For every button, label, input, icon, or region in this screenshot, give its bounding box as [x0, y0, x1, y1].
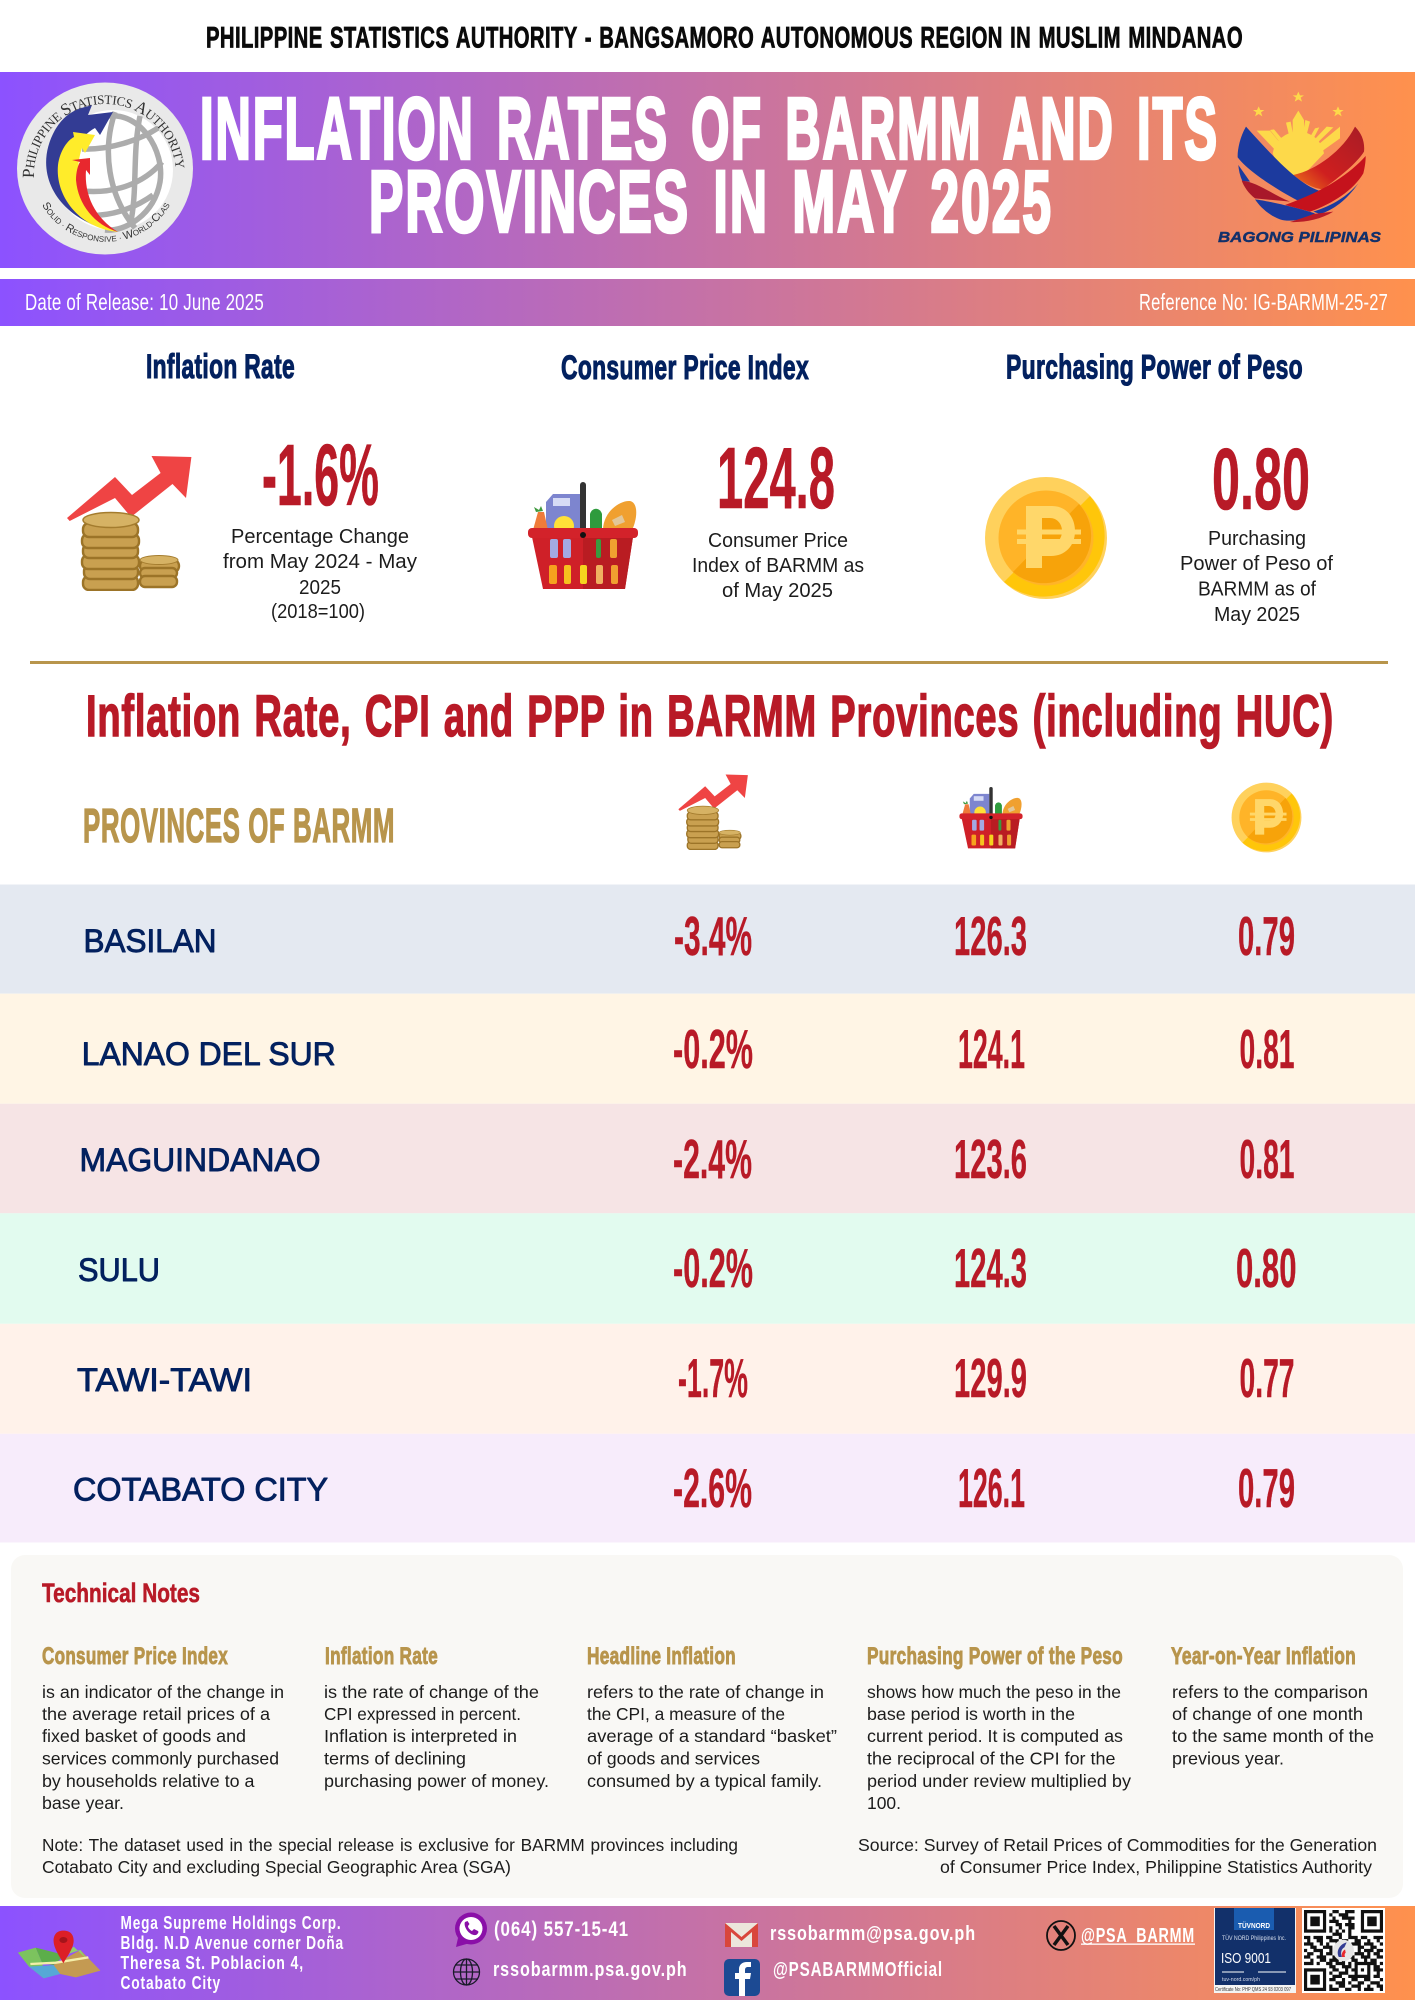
table row: Tawi-Tawi: TAWI-TAWI: [77, 1362, 252, 1398]
panel: purchasing power KPI: [985, 348, 1333, 626]
description: of May 2025: [722, 580, 833, 602]
note: purchasing power of the peso: base period is worth in the: [867, 1704, 1075, 1724]
table row: Sulu: 0.80: [1236, 1237, 1296, 1299]
table row: Sulu: -0.2%: [673, 1237, 753, 1299]
panel: footer contacts: [0, 1906, 1415, 2000]
note: year-on-year inflation: previous year.: [1172, 1748, 1284, 1768]
address: [120, 1913, 344, 1993]
table row: Basilan: 0.79: [1238, 905, 1295, 967]
note: inflation rate: purchasing power of money.: [324, 1771, 549, 1791]
address: Cotabato City: [120, 1973, 221, 1993]
icon: PPP column: [1232, 783, 1301, 852]
description: Consumer Price: [708, 530, 848, 552]
note: purchasing power of the peso: period under review multiplied by: [867, 1771, 1131, 1791]
icon: Bagong Pilipinas logo: [1218, 92, 1381, 246]
table row: Lanao del Sur: [0, 994, 1415, 1104]
description: 2025: [299, 577, 341, 599]
heading: Consumer Price Index: [561, 349, 809, 387]
value: 124.8: [717, 430, 835, 527]
heading: Inflation Rate: [146, 348, 295, 386]
description: [1180, 528, 1333, 626]
ISO 9001 badge: TÜV NORD Philippines Inc.: [1222, 1935, 1286, 1942]
icon: coins and rising arrow: [67, 456, 191, 590]
panel: inflation rate KPI: [67, 348, 417, 623]
table row: Lanao del Sur: 0.81: [1240, 1018, 1294, 1080]
column heading: provinces: PROVINCES OF BARMM: [83, 800, 395, 853]
description: [692, 530, 864, 602]
ISO 9001 badge: TÜVNORD: [1238, 1921, 1270, 1930]
icon: CPI column: [959, 787, 1023, 848]
X account: [1047, 1921, 1195, 1950]
table row: Tawi-Tawi: -1.7%: [678, 1347, 748, 1409]
note: consumer price index: [42, 1643, 284, 1813]
description: Power of Peso of: [1180, 553, 1333, 575]
table header: [83, 775, 1301, 853]
note: inflation rate: terms of declining: [324, 1748, 466, 1768]
table row: Cotabato City: -2.6%: [673, 1457, 752, 1519]
note: year-on-year inflation: refers to the comparison: [1172, 1682, 1368, 1702]
source note: [858, 1835, 1377, 1877]
table row: Basilan: 126.3: [954, 905, 1027, 967]
note: headline inflation: of goods and services: [587, 1748, 760, 1768]
note: inflation rate: Inflation is interpreted in: [324, 1726, 517, 1746]
dataset note: Cotabato City and excluding Special Geographic Area (SGA): [42, 1857, 511, 1877]
note: year-on-year inflation: to the same month of the: [1172, 1726, 1374, 1746]
note: purchasing power of the peso: current period. It is computed as: [867, 1726, 1123, 1746]
note: headline inflation: Headline Inflation: [587, 1643, 736, 1670]
X account: @PSA_BARMM: [1081, 1925, 1195, 1947]
note: headline inflation: consumed by a typical family.: [587, 1771, 822, 1791]
table row: Maguindanao: 0.81: [1240, 1128, 1294, 1190]
source note: Source: Survey of Retail Prices of Commodities for the Generation: [858, 1835, 1377, 1855]
note: inflation rate: CPI expressed in percent.: [324, 1704, 521, 1724]
table row: Lanao del Sur: 124.1: [958, 1018, 1025, 1080]
table row: Basilan: BASILAN: [84, 923, 216, 959]
note: year-on-year inflation: [1171, 1643, 1374, 1768]
date of release: Date of Release: 10 June 2025: [25, 289, 264, 315]
source note: of Consumer Price Index, Philippine Statistics Authority: [940, 1857, 1372, 1877]
value: 0.80: [1212, 431, 1310, 528]
value: -1.6%: [262, 427, 379, 524]
notes title: Technical Notes: [42, 1578, 200, 1608]
QR code: [1302, 1908, 1385, 1993]
note: consumer price index: Consumer Price Index: [42, 1643, 228, 1670]
description: from May 2024 - May: [223, 551, 417, 573]
facebook contact: @PSABARMMOfficial: [773, 1959, 943, 1981]
table row: Lanao del Sur: LANAO DEL SUR: [82, 1036, 336, 1072]
note: purchasing power of the peso: [867, 1643, 1131, 1813]
dataset note: Note: The dataset used in the special release is exclusive for BARMM provinces including: [42, 1835, 738, 1855]
ISO 9001 badge: ISO 9001: [1221, 1950, 1271, 1967]
description: Purchasing: [1208, 528, 1306, 550]
icon: Bagong Pilipinas logo: BAGONG PILIPINAS: [1218, 229, 1381, 246]
description: BARMM as of: [1198, 578, 1316, 600]
ISO 9001 badge: Certificate No: PHP QMS 24 93 0203 097: [1215, 1987, 1291, 1993]
table row: Cotabato City: 0.79: [1238, 1457, 1295, 1519]
table row: Basilan: [0, 884, 1415, 994]
website contact: rssobarmm.psa.gov.ph: [493, 1959, 688, 1981]
note: consumer price index: services commonly purchased: [42, 1748, 279, 1768]
note: consumer price index: is an indicator of the change in: [42, 1682, 284, 1702]
description: Percentage Change: [231, 526, 409, 548]
note: purchasing power of the peso: shows how much the peso in the: [867, 1682, 1121, 1702]
table row: Sulu: [0, 1213, 1415, 1324]
phone contact: [455, 1912, 629, 1947]
phone contact: (064) 557-15-41: [494, 1918, 629, 1941]
note: inflation rate: [324, 1643, 549, 1791]
table row: Maguindanao: 123.6: [954, 1128, 1027, 1190]
description: [223, 526, 417, 623]
table row: Lanao del Sur: -0.2%: [673, 1018, 753, 1080]
note: consumer price index: the average retail prices of a: [42, 1704, 270, 1724]
table row: Cotabato City: COTABATO CITY: [73, 1472, 328, 1508]
email contact: rssobarmm@psa.gov.ph: [770, 1923, 976, 1945]
note: headline inflation: refers to the rate of change in: [587, 1682, 824, 1702]
note: consumer price index: by households relative to a: [42, 1771, 255, 1791]
ISO 9001 badge: tuv-nord.com/ph: [1222, 1977, 1260, 1983]
icon: peso coin: [985, 477, 1107, 599]
table row: Sulu: SULU: [78, 1252, 160, 1288]
panel: release info bar: [0, 279, 1415, 326]
table row: Tawi-Tawi: 0.77: [1240, 1347, 1294, 1409]
note: headline inflation: the CPI, a measure of the: [587, 1704, 785, 1724]
description: (2018=100): [271, 601, 365, 623]
table row: Tawi-Tawi: 129.9: [954, 1347, 1027, 1409]
icon: inflation column: [678, 775, 748, 849]
table row: Tawi-Tawi: [0, 1324, 1415, 1434]
dataset note: [42, 1835, 738, 1877]
icon: map pin: [18, 1931, 100, 1978]
ISO 9001 badge: [1214, 1908, 1296, 1993]
address: Mega Supreme Holdings Corp.: [120, 1913, 342, 1933]
note: inflation rate: Inflation Rate: [325, 1643, 438, 1670]
note: year-on-year inflation: of change of one month: [1172, 1704, 1363, 1724]
address: Bldg. N.D Avenue corner Doña: [120, 1933, 344, 1953]
description: Index of BARMM as: [692, 555, 864, 577]
table row: Cotabato City: 126.1: [958, 1457, 1025, 1519]
address: Theresa St. Poblacion 4,: [120, 1953, 304, 1973]
table row: Cotabato City: [0, 1434, 1415, 1542]
icon: PSA logo: [17, 82, 193, 254]
banner title: [200, 80, 1219, 250]
table row: Maguindanao: MAGUINDANAO: [80, 1142, 320, 1178]
panel: consumer price index KPI: [528, 349, 864, 602]
table row: Maguindanao: -2.4%: [673, 1128, 752, 1190]
facebook contact: [724, 1959, 943, 1996]
icon: PSA logo: PHILIPPINE STATISTICS AUTHORITY: [22, 95, 184, 178]
icon: grocery basket: [528, 482, 638, 589]
note: headline inflation: average of a standard “basket”: [587, 1726, 837, 1746]
table row: Maguindanao: [0, 1104, 1415, 1213]
table row: Sulu: 124.3: [954, 1237, 1027, 1299]
note: inflation rate: is the rate of change of the: [324, 1682, 539, 1702]
description: May 2025: [1214, 604, 1300, 626]
email contact: [725, 1923, 976, 1947]
note: purchasing power of the peso: Purchasing Power of the Peso: [867, 1643, 1123, 1670]
note: purchasing power of the peso: 100.: [867, 1793, 901, 1813]
note: headline inflation: [587, 1643, 837, 1791]
note: consumer price index: base year.: [42, 1793, 124, 1813]
note: purchasing power of the peso: the reciprocal of the CPI for the: [867, 1748, 1116, 1768]
website contact: [454, 1959, 688, 1985]
panel: title banner: [0, 72, 1415, 268]
panel: technical notes: [11, 1555, 1403, 1898]
note: consumer price index: fixed basket of goods and: [42, 1726, 246, 1746]
table row: Basilan: -3.4%: [674, 905, 752, 967]
